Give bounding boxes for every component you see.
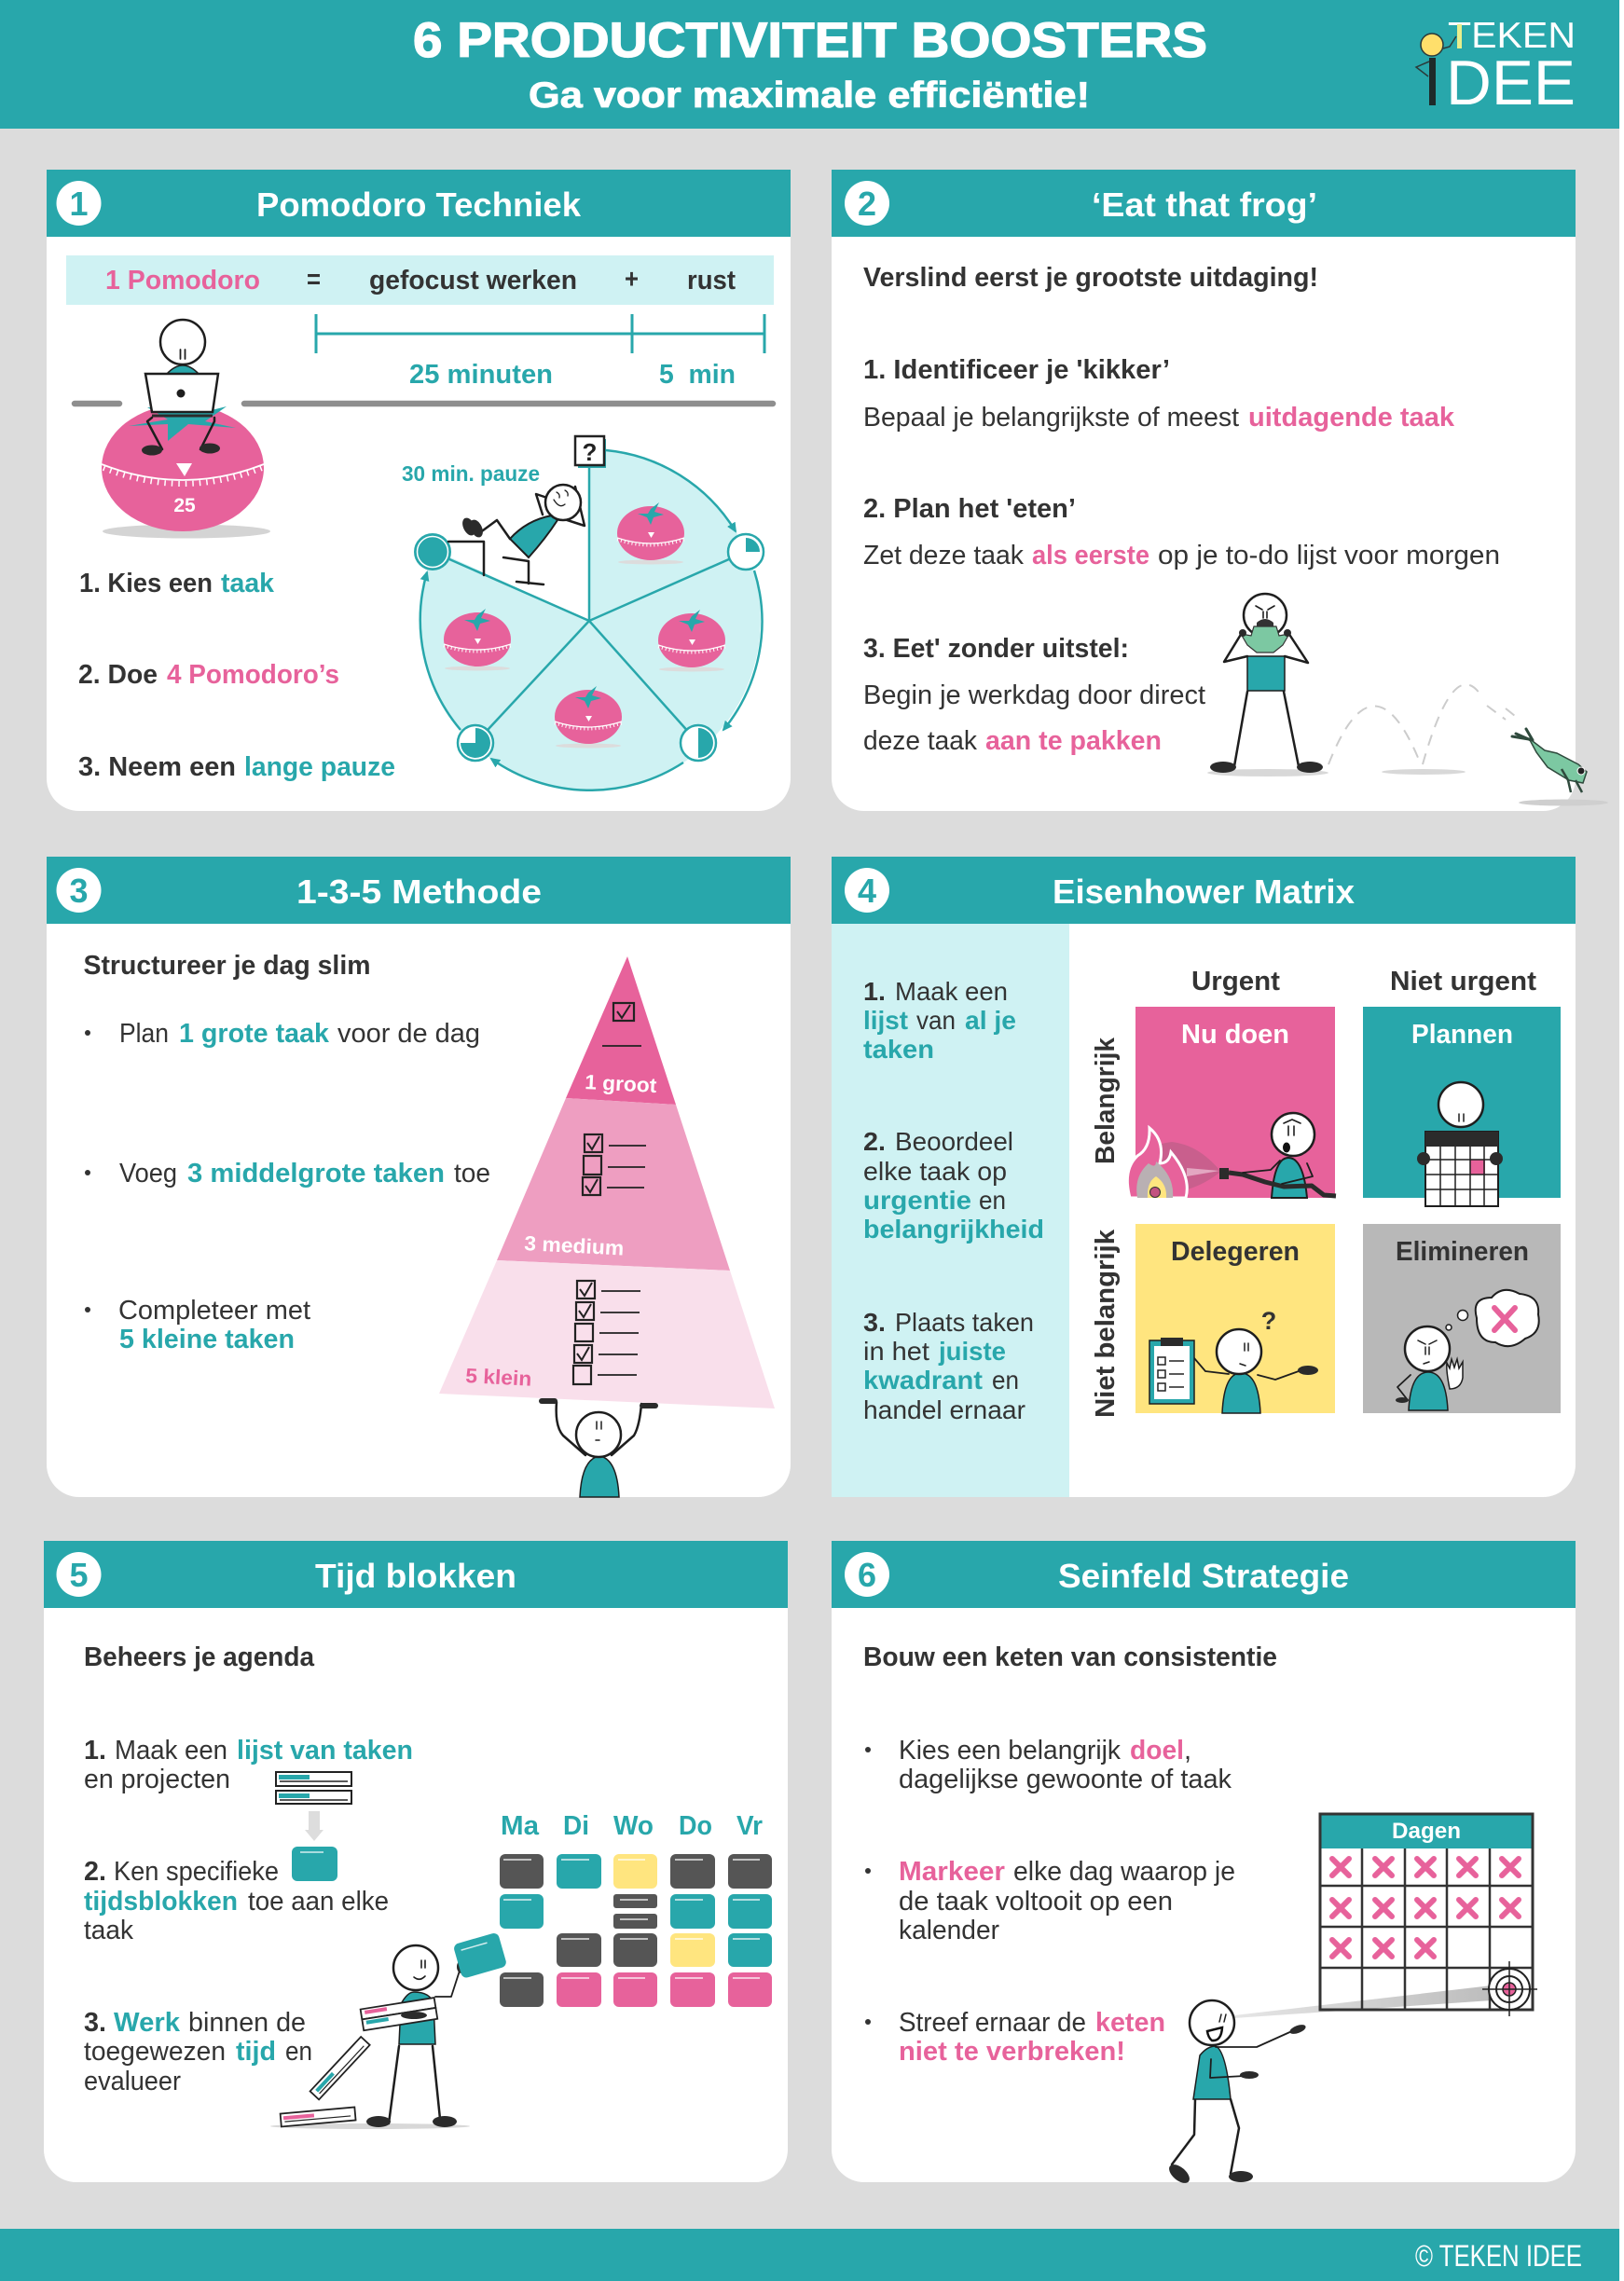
quadrant: Plannen: Plannen (1411, 1020, 1513, 1050)
bullet 2: elke dag waarop je (1013, 1857, 1235, 1887)
clipboard (1149, 1338, 1194, 1404)
pyramid: 1 groot (585, 1070, 658, 1097)
left instructions column: Plaats taken (895, 1308, 1034, 1337)
step 1 (863, 355, 1455, 433)
left instructions column: juiste (938, 1337, 1006, 1366)
panel 2: Eat that frog (832, 170, 1608, 811)
panel background (44, 1608, 788, 2182)
panel heading: 3 (69, 872, 89, 910)
title: 6 PRODUCTIVITEIT BOOSTERS (413, 13, 1207, 68)
step 3: Begin je werkdag door direct (863, 680, 1205, 710)
step 1: 1. Identificeer je 'kikker’ (863, 355, 1170, 385)
panel heading: 6 (858, 1556, 876, 1594)
quadrant: Plannen (1363, 1007, 1561, 1206)
quadrant: Elimineren: Elimineren (1396, 1237, 1529, 1267)
weekday labels: Wo (613, 1811, 654, 1841)
step 1 (84, 1736, 413, 1794)
steps list: taak (221, 569, 275, 598)
step 3: tijd (236, 2037, 276, 2067)
dial: quarter (728, 534, 764, 570)
time bracket (316, 314, 764, 390)
panel 3: 1-3-5 Methode (47, 857, 791, 1497)
tier 1 checklist (602, 1003, 641, 1046)
step 2: toe aan elke (248, 1887, 389, 1917)
left instructions column: lijst (863, 1006, 908, 1035)
step 3 (863, 634, 1205, 756)
intro line: Beheers je agenda (84, 1642, 315, 1672)
panel 5: Tijd blokken (44, 1541, 788, 2182)
weekday labels: Ma (501, 1811, 540, 1841)
task bars icon (276, 1772, 351, 1804)
step 3: 3. (84, 2008, 106, 2038)
steps list: 1. Kies een (79, 569, 213, 598)
panel heading: Eisenhower Matrix (1053, 873, 1355, 911)
subtitle: Ga voor maximale efficiëntie! (529, 76, 1090, 116)
bullet 3 (865, 2008, 1165, 2067)
panel 1: Pomodoro Techniek (47, 170, 791, 811)
marked days (1332, 1859, 1519, 1957)
frog jump trail (1328, 684, 1520, 764)
equation bar: gefocust werken (369, 266, 577, 295)
step 3: binnen de (188, 2008, 306, 2038)
weekday labels: Do (679, 1811, 712, 1841)
tier 3 checklist (573, 1281, 640, 1384)
panel heading (832, 170, 1576, 237)
bullet list: Plan (119, 1019, 169, 1049)
pyramid (439, 956, 775, 1408)
left instructions column: Beoordeel (895, 1127, 1013, 1156)
days calendar: Dagen (1392, 1819, 1461, 1844)
dial: half (681, 725, 716, 761)
step 3: en (285, 2037, 312, 2067)
row labels (1091, 1037, 1121, 1418)
row labels: Belangrijk (1091, 1037, 1121, 1164)
column labels: Niet urgent (1390, 967, 1536, 996)
intro line: Verslind eerst je grootste uitdaging! (863, 263, 1318, 293)
left instructions column: al je (965, 1006, 1016, 1035)
weekly block calendar (500, 1854, 772, 2007)
step 2: taak (84, 1916, 133, 1945)
step 1: en projecten (84, 1765, 230, 1794)
step 1: lijst van taken (237, 1736, 413, 1766)
arrow down (305, 1811, 323, 1841)
days calendar (1234, 1814, 1537, 2018)
equation bar: rust (687, 266, 736, 295)
footer band (0, 2229, 1619, 2281)
equation bar: + (625, 265, 639, 295)
pomodoro cycle wheel (415, 436, 764, 790)
bullet 3: niet te verbreken! (899, 2037, 1125, 2067)
step 1: 1. (84, 1736, 106, 1766)
panel heading (832, 1541, 1576, 1608)
relaxing person (448, 485, 585, 584)
quadrant: Elimineren (1363, 1224, 1561, 1413)
step 3: Werk (114, 2008, 181, 2038)
panel 4: Eisenhower Matrix (832, 857, 1576, 1497)
bullet list: 1 grote taak (179, 1019, 330, 1049)
fallen bar (281, 2108, 356, 2126)
step 3: 3. Eet' zonder uitstel: (863, 634, 1129, 664)
bullet 2: Markeer (899, 1857, 1005, 1887)
left instructions column: 3. (863, 1308, 886, 1337)
bullet list: Completeer met (118, 1296, 310, 1326)
bullet list: voor de dag (337, 1019, 480, 1049)
splash shadow (1382, 769, 1466, 775)
panel heading (47, 170, 791, 237)
row labels: Niet belangrijk (1091, 1229, 1121, 1418)
left instructions column (832, 924, 1069, 1497)
left instructions column: kwadrant (863, 1366, 983, 1395)
step 2: 2. (84, 1857, 106, 1887)
right edge strip (1619, 0, 1624, 2281)
left instructions column: elke taak op (863, 1157, 1007, 1186)
dial: full (415, 534, 450, 570)
person holding pyramid (539, 1398, 658, 1497)
panel heading (47, 857, 791, 924)
weekday labels: Vr (736, 1811, 763, 1841)
step 2 (84, 1857, 389, 1945)
left instructions column: belangrijkheid (863, 1215, 1044, 1244)
step 3 (84, 2008, 312, 2096)
panel heading: 2 (858, 185, 876, 223)
big tomato timer with person: 25 (173, 495, 196, 516)
header band (0, 0, 1619, 129)
bullet 1: doel (1130, 1736, 1184, 1766)
steps list: lange pauze (244, 752, 395, 782)
bullet 2: kalender (899, 1916, 999, 1945)
dial: three quarters (458, 725, 493, 761)
logo: DEE (1446, 48, 1576, 118)
target (1482, 1961, 1537, 2016)
step 2: Ken specifieke (114, 1857, 279, 1887)
quadrant: Delegeren: ? (1261, 1307, 1276, 1335)
bullet 1: Kies een belangrijk (899, 1736, 1121, 1766)
bullet 2 (865, 1857, 1235, 1945)
step 1: Maak een (115, 1736, 227, 1766)
intro line: Structureer je dag slim (84, 951, 371, 981)
panel background (832, 1608, 1576, 2182)
logo (1416, 16, 1576, 118)
column labels (1191, 967, 1536, 996)
equation bar: = (307, 265, 321, 295)
gray desk line (75, 401, 773, 406)
quadrant: Nu doen (1127, 1007, 1336, 1198)
step 2: als eerste (1032, 541, 1149, 570)
time bracket: 5 min (659, 360, 736, 390)
panel 6: Seinfeld Strategie (832, 1541, 1576, 2187)
jumping frog (1512, 729, 1608, 805)
left instructions column: in het (863, 1337, 929, 1366)
intro line: Bouw een keten van consistentie (863, 1642, 1277, 1672)
step 1: Bepaal je belangrijkste of meest (863, 403, 1239, 433)
bullet list: 5 kleine taken (119, 1325, 295, 1354)
footer band: © TEKEN IDEE (1415, 2239, 1582, 2273)
bullet 1 (865, 1736, 1232, 1794)
equation bar (66, 255, 774, 305)
step 3: evalueer (84, 2067, 181, 2096)
tier 2 checklist (583, 1134, 646, 1195)
left instructions column: 2. (863, 1127, 886, 1156)
bullet list: 3 middelgrote taken (187, 1159, 445, 1189)
bullet list: Voeg (119, 1159, 177, 1189)
panel heading (832, 857, 1576, 924)
steps list: 4 Pomodoro’s (167, 660, 339, 690)
bullet 1: , (1184, 1736, 1191, 1766)
pyramid: 5 klein (465, 1364, 532, 1391)
left instructions column: en (979, 1186, 1006, 1215)
bullet list (85, 1019, 490, 1354)
question box: ? (583, 438, 597, 466)
thought cloud (1446, 1290, 1539, 1346)
bullet 3: Streef ernaar de (899, 2008, 1086, 2038)
bullet 1: dagelijkse gewoonte of taak (899, 1765, 1232, 1794)
time bracket: 25 minuten (409, 360, 553, 390)
steps list: 2. Doe (78, 660, 158, 690)
left instructions column: van (916, 1006, 956, 1035)
panel heading: ‘Eat that frog’ (1092, 186, 1317, 224)
bullet list: toe (454, 1159, 490, 1189)
panel heading: Tijd blokken (315, 1557, 516, 1595)
big tomato timer with person (102, 320, 270, 539)
equation bar: 1 Pomodoro (105, 266, 260, 295)
panel heading: Seinfeld Strategie (1058, 1557, 1349, 1595)
step 2: op je to-do lijst voor morgen (1158, 541, 1500, 570)
calendar (1417, 1132, 1503, 1206)
quadrant: Delegeren: Delegeren (1171, 1237, 1300, 1267)
weekday labels: Di (563, 1811, 589, 1841)
panel background (47, 237, 791, 811)
steps list (78, 569, 395, 782)
panel heading (44, 1541, 788, 1608)
step 2 (863, 494, 1500, 570)
bullet 2: de taak voltooit op een (899, 1887, 1173, 1917)
person placing blocks (270, 1932, 507, 2129)
step 1: uitdagende taak (1248, 403, 1455, 433)
person eating frog (1207, 594, 1328, 776)
left instructions column: handel ernaar (863, 1395, 1025, 1424)
left instructions column: taken (863, 1035, 934, 1064)
panel heading: 1 (69, 185, 89, 223)
step 2: 2. Plan het 'eten’ (863, 494, 1076, 524)
panel heading: 4 (858, 872, 876, 910)
quadrant: Delegeren (1135, 1224, 1335, 1413)
left instructions column: urgentie (863, 1186, 971, 1215)
left instructions column: 1. (863, 977, 886, 1006)
bullet 3: keten (1095, 2008, 1165, 2038)
lifted block (453, 1932, 507, 1979)
panel heading: 1-3-5 Methode (296, 873, 542, 911)
left instructions column: Maak een (895, 977, 1008, 1006)
question box (575, 436, 606, 468)
break label: 30 min. pauze (402, 461, 540, 486)
step 2: tijdsblokken (84, 1887, 238, 1917)
column labels: Urgent (1191, 967, 1280, 996)
step 3: aan te pakken (985, 726, 1162, 756)
step 3: deze taak (863, 726, 977, 756)
spray and fire (1127, 1128, 1219, 1198)
left instructions column: en (992, 1366, 1019, 1395)
falling bar (310, 2037, 370, 2099)
time block icon (292, 1847, 337, 1881)
panel background (47, 924, 791, 1497)
weekday labels (501, 1811, 763, 1841)
held bars (361, 1998, 437, 2030)
pyramid: 3 medium (524, 1231, 625, 1260)
steps list: 3. Neem een (78, 752, 236, 782)
panel background (832, 237, 1576, 811)
pointing person (1166, 2000, 1307, 2187)
step 3: toegewezen (84, 2037, 226, 2067)
panel heading: Pomodoro Techniek (256, 186, 582, 224)
step 2: Zet deze taak (863, 541, 1024, 570)
logo: TEKEN (1448, 16, 1576, 56)
panel background (832, 924, 1576, 1497)
panel heading: 5 (69, 1556, 89, 1594)
quadrant: Nu doen: Nu doen (1181, 1020, 1289, 1050)
